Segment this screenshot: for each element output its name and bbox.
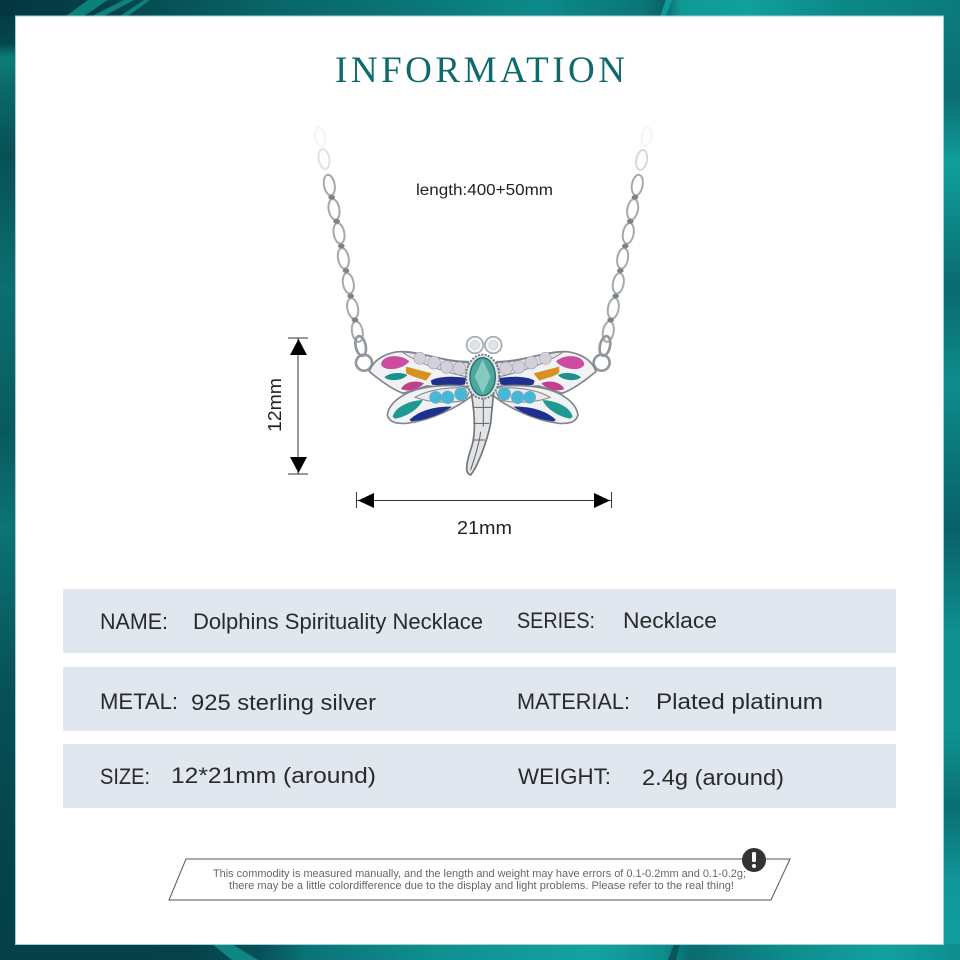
left wings bbox=[369, 352, 472, 423]
spec row: name and series: NAME: bbox=[100, 609, 168, 634]
width dimension: 21mm bbox=[356, 492, 612, 538]
right wings bbox=[494, 352, 596, 423]
necklace chain right bbox=[601, 127, 653, 343]
spec row: name and series: SERIES: bbox=[517, 608, 595, 633]
length label: length:400+50mm bbox=[416, 182, 553, 199]
spec row: metal and material: MATERIAL: bbox=[517, 689, 630, 714]
width dimension: 21mm: 21mm bbox=[457, 518, 512, 538]
height dimension: 12mm bbox=[265, 338, 308, 474]
spec row: size and weight: 12*21mm (around) bbox=[171, 763, 376, 788]
height dimension: 12mm: 12mm bbox=[265, 378, 285, 432]
spec row: name and series: Necklace bbox=[623, 608, 717, 633]
disclaimer box: This commodity is measured manually, and the length and weight may have errors of 0.1-0.2mm and 0.1-0.2g; bbox=[213, 868, 746, 880]
center gem bbox=[466, 355, 499, 399]
eyes bbox=[467, 337, 502, 353]
spec row: size and weight: SIZE: bbox=[100, 764, 150, 789]
spec row: size and weight: 2.4g (around) bbox=[642, 765, 784, 790]
disclaimer box: there may be a little colordifference due to the display and light problems. Please refer to the real thing! bbox=[229, 880, 734, 892]
spec row: metal and material: METAL: bbox=[100, 689, 178, 714]
dragonfly pendant bbox=[354, 335, 612, 475]
jump rings bbox=[354, 335, 612, 371]
spec row: size and weight: WEIGHT: bbox=[518, 764, 611, 789]
spec row: name and series: Dolphins Spirituality Necklace bbox=[193, 609, 483, 634]
icon: warning bbox=[742, 848, 766, 872]
necklace chain left bbox=[313, 127, 364, 343]
spec row: size and weight bbox=[63, 744, 896, 808]
spec row: metal and material: 925 sterling silver bbox=[191, 690, 376, 715]
title: INFORMATION bbox=[335, 50, 625, 91]
spec row: name and series bbox=[63, 589, 896, 653]
spec row: metal and material: Plated platinum bbox=[656, 689, 823, 714]
spec row: metal and material bbox=[63, 667, 896, 731]
abdomen bbox=[467, 395, 493, 475]
disclaimer box bbox=[169, 859, 790, 900]
